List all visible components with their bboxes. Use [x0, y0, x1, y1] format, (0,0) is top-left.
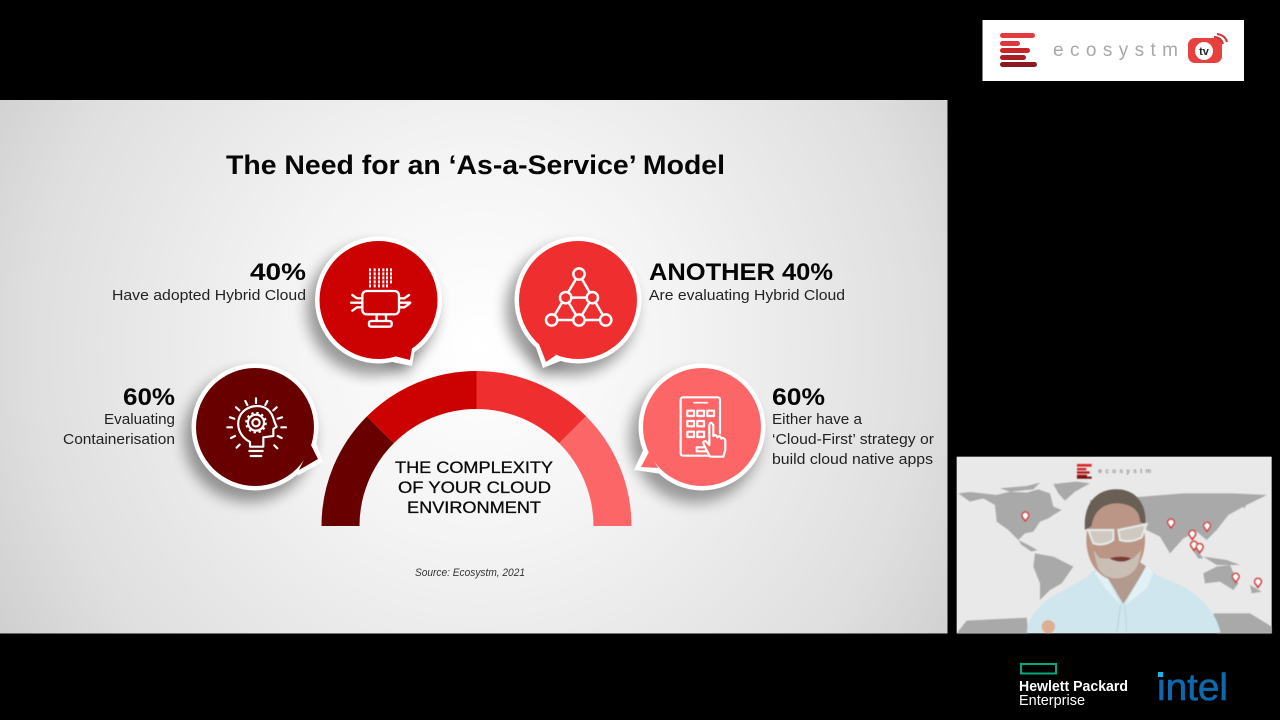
hpe green mark: [1021, 664, 1056, 674]
map logo: [1077, 464, 1151, 479]
icon: tablet with finger: [681, 397, 725, 457]
gauge caption: [395, 458, 553, 517]
slide panel: [0, 100, 948, 634]
logo wordmark: ecosystm: [1053, 40, 1178, 61]
bubble: evaluating hybrid cloud: [506, 236, 642, 380]
label: 60% cloud first: ‘Cloud-First’ strategy or: [772, 431, 934, 448]
presenter video panel: [957, 457, 1272, 633]
label: 60% cloud first: build cloud native apps: [772, 451, 933, 468]
label: 60% containerisation: [63, 384, 175, 448]
label: 40% adopted: Have adopted Hybrid Cloud: [112, 287, 306, 304]
presenter: [1027, 489, 1221, 633]
source note: Source: Ecosystm, 2021: [415, 567, 525, 579]
hpe wordmark: Hewlett Packard: [1019, 679, 1128, 695]
map logo: ecosystm: [1098, 468, 1151, 475]
gauge caption: THE COMPLEXITY: [395, 458, 553, 477]
logo tv icon: [1188, 34, 1227, 63]
icon: head with gear and bulb: [227, 398, 286, 456]
label: another 40%: [649, 259, 845, 304]
hpe wordmark: [1019, 679, 1128, 709]
label: 60% containerisation: Evaluating: [104, 411, 175, 428]
map pins: [1022, 512, 1261, 587]
label: 60% containerisation: Containerisation: [63, 431, 175, 448]
hewlett packard enterprise logo: [1019, 664, 1128, 709]
gauge segment: salmon: [559, 416, 632, 526]
label: 60% cloud first: Either have a: [772, 411, 863, 428]
gauge segment: dark red: [322, 416, 394, 526]
icon: monitor with data: [351, 268, 410, 327]
label: 60% cloud first: [772, 384, 934, 468]
bubble: containerisation: [184, 364, 323, 502]
logo mark bars: [1000, 33, 1037, 67]
gauge segment: red: [367, 371, 476, 443]
gauge: semicircular complexity arc: [322, 371, 632, 526]
icon: network triangle: [546, 268, 611, 326]
bubble: hybrid cloud adopters: [307, 236, 442, 378]
gauge caption: ENVIRONMENT: [407, 498, 541, 517]
bubble: cloud first: [630, 364, 766, 503]
hpe wordmark: Enterprise: [1019, 693, 1085, 709]
label: another 40%: ANOTHER 40%: [649, 259, 833, 286]
label: 40% adopted: [112, 259, 306, 304]
intel logo: intel: [1157, 667, 1228, 709]
gauge segment: bright red: [476, 371, 586, 443]
label: another 40%: Are evaluating Hybrid Cloud: [649, 287, 845, 304]
world map: [957, 482, 1272, 633]
logo tv icon: tv: [1199, 46, 1210, 58]
ecosystm tv logo: [982, 20, 1244, 81]
gauge caption: OF YOUR CLOUD: [398, 478, 551, 497]
label: 60% cloud first: 60%: [772, 384, 825, 411]
label: 40% adopted: 40%: [250, 259, 306, 286]
title: The Need for an ‘As-a-Service’ Model: [226, 150, 725, 180]
glasses: [1088, 524, 1147, 544]
label: 60% containerisation: 60%: [123, 384, 175, 411]
